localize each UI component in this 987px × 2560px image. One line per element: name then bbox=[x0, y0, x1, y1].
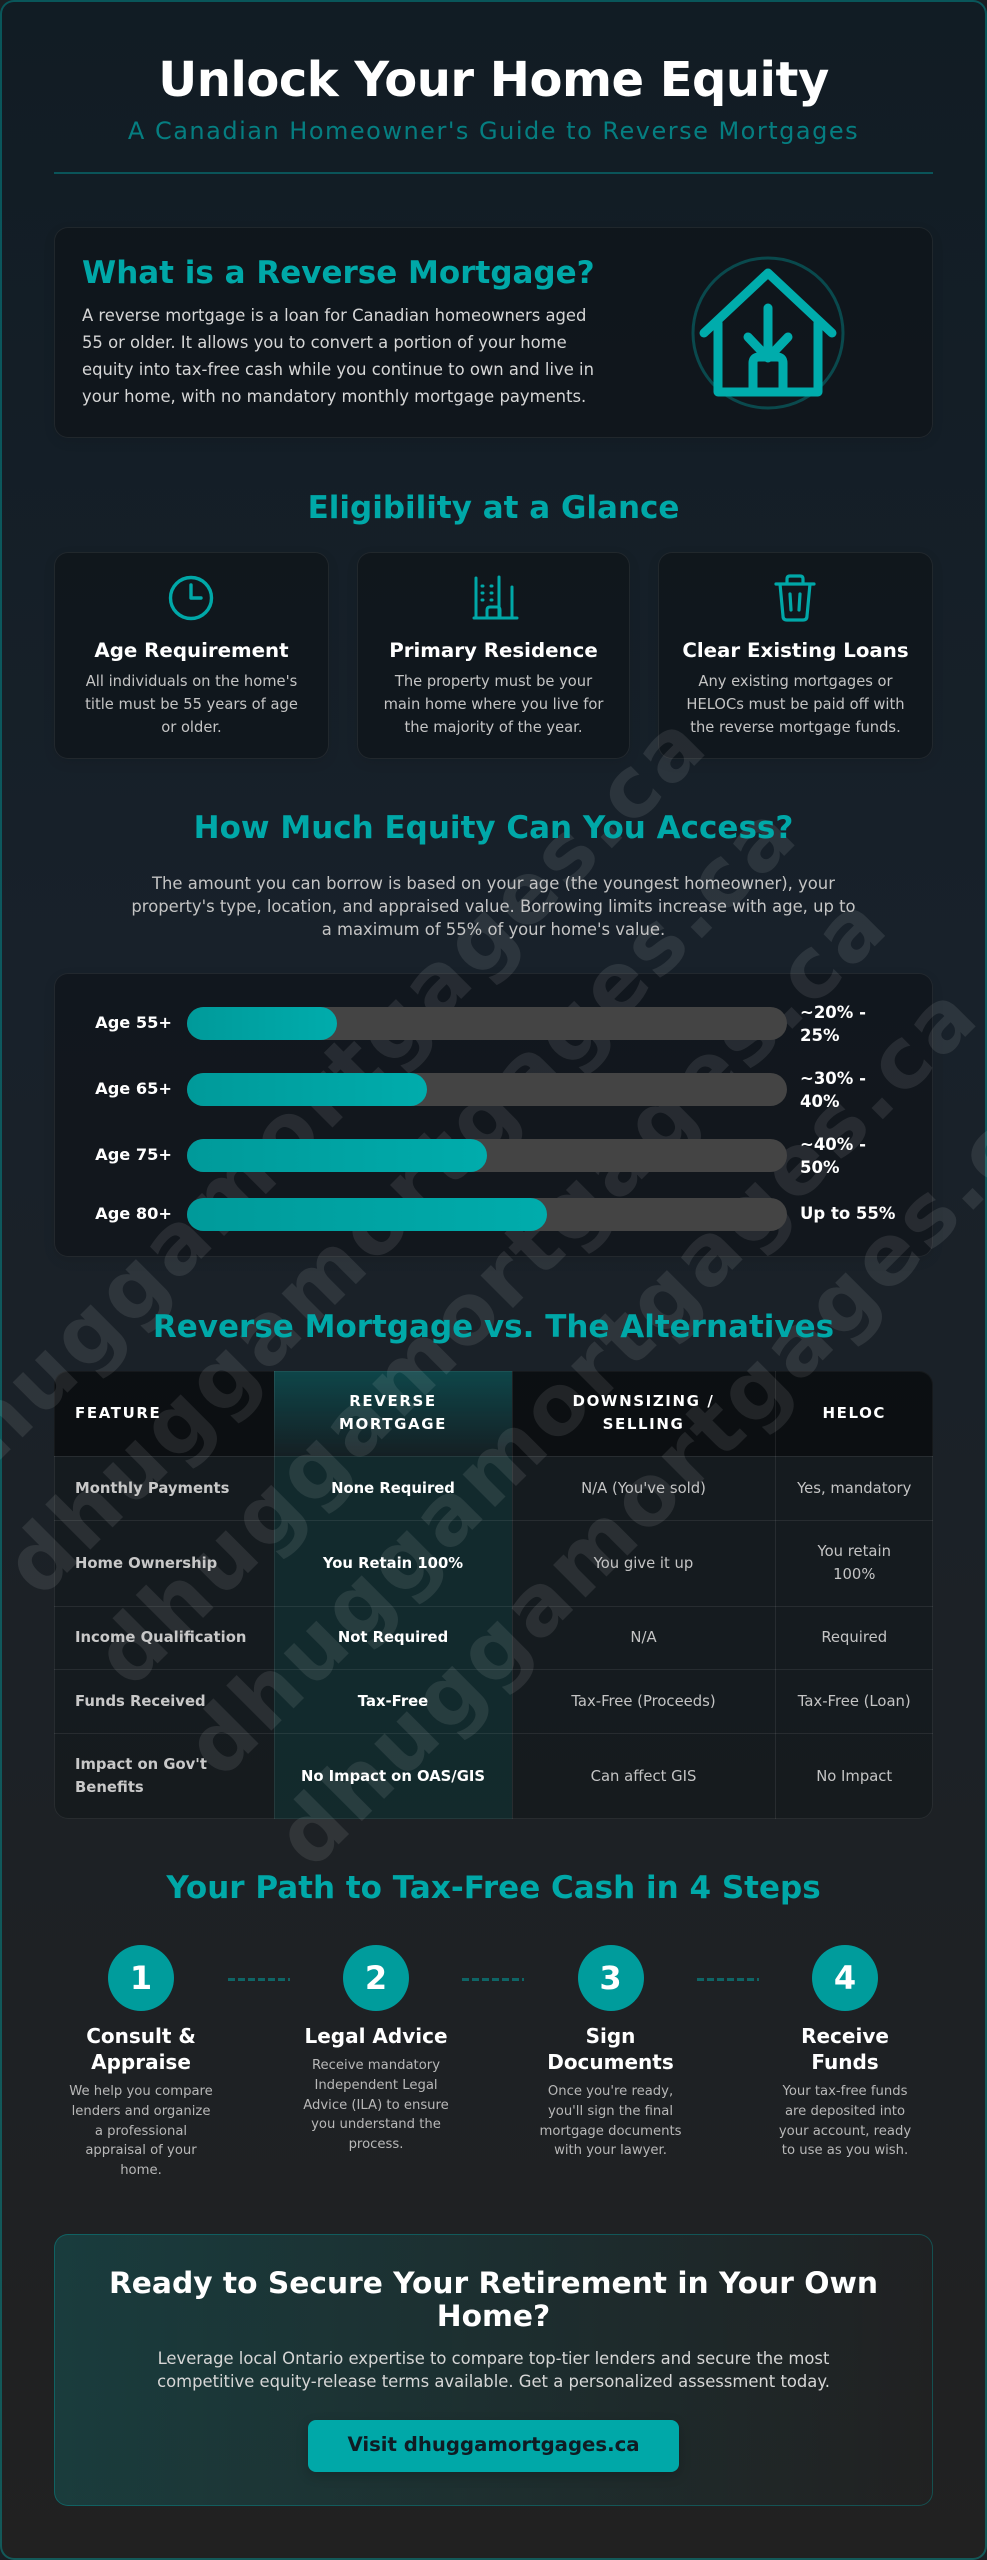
icon: house with down arrow bbox=[692, 256, 844, 410]
card text bbox=[85, 673, 298, 736]
step 1 text bbox=[69, 2084, 213, 2178]
comparison table: N/A (You've sold) bbox=[581, 1480, 706, 1496]
heading: how much equity: How Much Equity Can You Access? bbox=[194, 810, 793, 846]
comparison table: N/A bbox=[630, 1629, 657, 1646]
comparison table: You retain bbox=[818, 1543, 891, 1560]
heading: steps: Your Path to Tax-Free Cash in 4 Steps bbox=[166, 1870, 821, 1906]
comparison table: Can affect GIS bbox=[591, 1768, 696, 1785]
comparison table: No Impact bbox=[816, 1768, 892, 1785]
comparison table: Yes, mandatory bbox=[797, 1480, 911, 1496]
comparison table: Not Required bbox=[338, 1629, 448, 1646]
bar: age 80+ bbox=[187, 1198, 787, 1231]
text: equity intro: The amount you can borrow is based on your age (the youngest homeowner), your bbox=[152, 874, 835, 892]
step 4 title: Receive bbox=[801, 2024, 889, 2048]
value: age 75+: 50% bbox=[800, 1158, 840, 1177]
watermark: dhuggamortgages.ca bbox=[0, 783, 816, 1614]
comparison table: Tax-Free (Loan) bbox=[798, 1692, 911, 1710]
step 4 title: Funds bbox=[811, 2050, 879, 2074]
card text: or older. bbox=[161, 719, 222, 736]
header divider bbox=[54, 172, 933, 174]
card text: The property must be your bbox=[395, 673, 592, 690]
card text: Any existing mortgages or bbox=[698, 673, 893, 690]
panel: primary residence bbox=[357, 552, 630, 759]
step 2 number: 2 bbox=[365, 1959, 387, 1997]
panel: what is a reverse mortgage bbox=[54, 227, 933, 438]
value: age 80+: Up to 55% bbox=[800, 1204, 895, 1223]
label: age 75+: Age 75+ bbox=[95, 1145, 172, 1164]
connector 2 bbox=[462, 1978, 524, 1981]
card text: main home where you live for bbox=[384, 696, 603, 713]
step 1 title bbox=[86, 2024, 196, 2074]
step 3 text: with your lawyer. bbox=[554, 2143, 667, 2158]
step 4 text: Your tax-free funds bbox=[783, 2084, 907, 2099]
step 2 text: Independent Legal bbox=[314, 2078, 438, 2093]
watermark: dhuggamortgages.ca bbox=[75, 873, 907, 1705]
panel: equity bar chart bbox=[54, 973, 933, 1257]
step 4 title bbox=[801, 2024, 889, 2074]
step 1 title: Consult & bbox=[86, 2024, 196, 2048]
value: age 55+ bbox=[800, 1003, 866, 1045]
bar: age 75+ bbox=[187, 1139, 787, 1172]
step 1 bbox=[69, 1945, 213, 2178]
comparison table: SELLING bbox=[603, 1415, 684, 1433]
text: definition: A reverse mortgage is a loan for Canadian homeowners aged bbox=[82, 306, 586, 325]
comparison table: Required bbox=[821, 1629, 887, 1646]
card title: Clear Existing Loans bbox=[682, 639, 909, 662]
comparison table: REVERSE bbox=[349, 1392, 437, 1410]
step 3 bbox=[539, 1945, 682, 2158]
connector 3 bbox=[697, 1978, 759, 1981]
step 3 text: you'll sign the final bbox=[548, 2104, 673, 2119]
value: age 75+ bbox=[800, 1135, 866, 1177]
step 3 text bbox=[539, 2084, 682, 2158]
step 1 text: a professional bbox=[95, 2124, 187, 2139]
label: age 55+: Age 55+ bbox=[95, 1013, 172, 1032]
step 1 number: 1 bbox=[130, 1959, 152, 1997]
comparison table: Tax-Free (Proceeds) bbox=[571, 1692, 716, 1710]
cta text: Leverage local Ontario expertise to compare top-tier lenders and secure the most bbox=[158, 2349, 829, 2368]
bar: age 55+ bbox=[187, 1007, 787, 1040]
step 4 bbox=[779, 1945, 911, 2158]
comparison table: Tax-Free bbox=[358, 1692, 428, 1710]
icon: building bbox=[472, 576, 518, 620]
step 2 text: Receive mandatory bbox=[312, 2058, 440, 2073]
comparison table: DOWNSIZING / bbox=[573, 1392, 714, 1410]
card text: All individuals on the home's bbox=[86, 673, 297, 690]
card text: the majority of the year. bbox=[404, 719, 583, 736]
card text bbox=[686, 673, 905, 736]
step 1 text: home. bbox=[120, 2163, 162, 2178]
icon: trash can bbox=[774, 574, 816, 622]
cta button: Visit dhuggamortgages.ca bbox=[347, 2433, 640, 2456]
comparison table bbox=[54, 1371, 933, 1819]
text: equity intro: property's type, location, and appraised value. Borrowing limits increase with age, up to bbox=[131, 896, 856, 916]
cta heading: Home? bbox=[437, 2299, 550, 2334]
heading: what is a reverse mortgage: What is a Reverse Mortgage? bbox=[82, 255, 595, 291]
subtitle: A Canadian Homeowner's Guide to Reverse Mortgages bbox=[128, 117, 859, 145]
step 1 number bbox=[108, 1945, 174, 2011]
step 2 text: you understand the bbox=[311, 2117, 441, 2132]
label: age 80+: Age 80+ bbox=[95, 1204, 172, 1223]
step 1 text: lenders and organize bbox=[72, 2104, 210, 2119]
value: age 65+ bbox=[800, 1069, 866, 1111]
cta text bbox=[157, 2349, 830, 2391]
icon: clock bbox=[168, 576, 214, 620]
comparison table: Income Qualification bbox=[75, 1629, 246, 1646]
card title: Age Requirement bbox=[94, 639, 289, 662]
value: age 55+: ~20% - bbox=[800, 1003, 866, 1022]
text: definition bbox=[82, 306, 594, 406]
cta heading: Ready to Secure Your Retirement in Your Own bbox=[109, 2266, 878, 2301]
cta text: competitive equity-release terms available. Get a personalized assessment today. bbox=[157, 2372, 830, 2391]
comparison table: Monthly Payments bbox=[75, 1480, 229, 1496]
comparison table: Home Ownership bbox=[75, 1554, 217, 1572]
cta heading bbox=[109, 2266, 878, 2334]
text: equity intro bbox=[131, 874, 856, 938]
card text: the reverse mortgage funds. bbox=[690, 719, 901, 736]
comparison table: HELOC bbox=[822, 1404, 886, 1422]
step 2 text: process. bbox=[349, 2137, 403, 2152]
step 2 title: Legal Advice bbox=[304, 2024, 448, 2048]
step 2 text: Advice (ILA) to ensure bbox=[303, 2098, 449, 2113]
panel: clear existing loans bbox=[658, 552, 933, 759]
comparison table: 100% bbox=[833, 1566, 875, 1583]
step 3 title: Sign bbox=[586, 2024, 635, 2048]
card text bbox=[384, 673, 604, 736]
value: age 65+: ~30% - bbox=[800, 1069, 866, 1088]
step 1 text: We help you compare bbox=[69, 2084, 213, 2099]
heading: comparison: Reverse Mortgage vs. The Alternatives bbox=[153, 1309, 834, 1345]
comparison table: Impact on Gov't bbox=[75, 1756, 207, 1773]
step 3 text: Once you're ready, bbox=[548, 2084, 673, 2099]
comparison table: No Impact on OAS/GIS bbox=[301, 1768, 485, 1785]
value: age 55+: 25% bbox=[800, 1026, 840, 1045]
comparison table: FEATURE bbox=[75, 1404, 161, 1422]
card text: HELOCs must be paid off with bbox=[686, 696, 905, 713]
heading: eligibility: Eligibility at a Glance bbox=[308, 490, 679, 526]
step 2 number bbox=[343, 1945, 409, 2011]
text: definition: your home, with no mandatory monthly mortgage payments. bbox=[82, 387, 586, 406]
step 3 title: Documents bbox=[547, 2050, 674, 2074]
comparison table: You Retain 100% bbox=[323, 1554, 463, 1572]
comparison table: None Required bbox=[331, 1480, 455, 1496]
cta button bbox=[308, 2420, 679, 2472]
card text: title must be 55 years of age bbox=[85, 696, 298, 713]
step 4 number bbox=[812, 1945, 878, 2011]
step 3 number: 3 bbox=[599, 1959, 622, 1997]
step 4 text: to use as you wish. bbox=[782, 2143, 908, 2158]
comparison table: Benefits bbox=[75, 1779, 144, 1796]
value: age 75+: ~40% - bbox=[800, 1135, 866, 1154]
text: equity intro: a maximum of 55% of your home's value. bbox=[322, 920, 665, 938]
bar: age 65+ bbox=[187, 1073, 787, 1106]
step 1 text: appraisal of your bbox=[85, 2143, 197, 2158]
text: definition: equity into tax-free cash while you continue to own and live in bbox=[82, 360, 594, 379]
step 4 number: 4 bbox=[834, 1959, 856, 1997]
label: age 65+: Age 65+ bbox=[95, 1079, 172, 1098]
comparison table: MORTGAGE bbox=[339, 1415, 447, 1433]
step 4 text: your account, ready bbox=[779, 2124, 911, 2139]
connector 1 bbox=[228, 1978, 290, 1981]
comparison table: You give it up bbox=[594, 1554, 693, 1572]
comparison table: Funds Received bbox=[75, 1692, 206, 1710]
text: definition: 55 or older. It allows you to convert a portion of your home bbox=[82, 333, 567, 352]
title: Unlock Your Home Equity bbox=[158, 52, 829, 108]
step 3 title bbox=[547, 2024, 674, 2074]
step 3 text: mortgage documents bbox=[539, 2124, 682, 2139]
step 2 text bbox=[303, 2058, 449, 2152]
step 1 title: Appraise bbox=[91, 2050, 191, 2074]
card title: Primary Residence bbox=[389, 639, 598, 662]
step 4 text: are deposited into bbox=[785, 2104, 905, 2119]
watermark: dhuggamortgages.ca bbox=[166, 964, 987, 1795]
value: age 65+: 40% bbox=[800, 1092, 840, 1111]
step 2 bbox=[303, 1945, 449, 2152]
step 3 number bbox=[578, 1945, 644, 2011]
step 4 text bbox=[779, 2084, 911, 2158]
panel: call to action bbox=[54, 2234, 933, 2506]
panel: age requirement bbox=[54, 552, 329, 759]
